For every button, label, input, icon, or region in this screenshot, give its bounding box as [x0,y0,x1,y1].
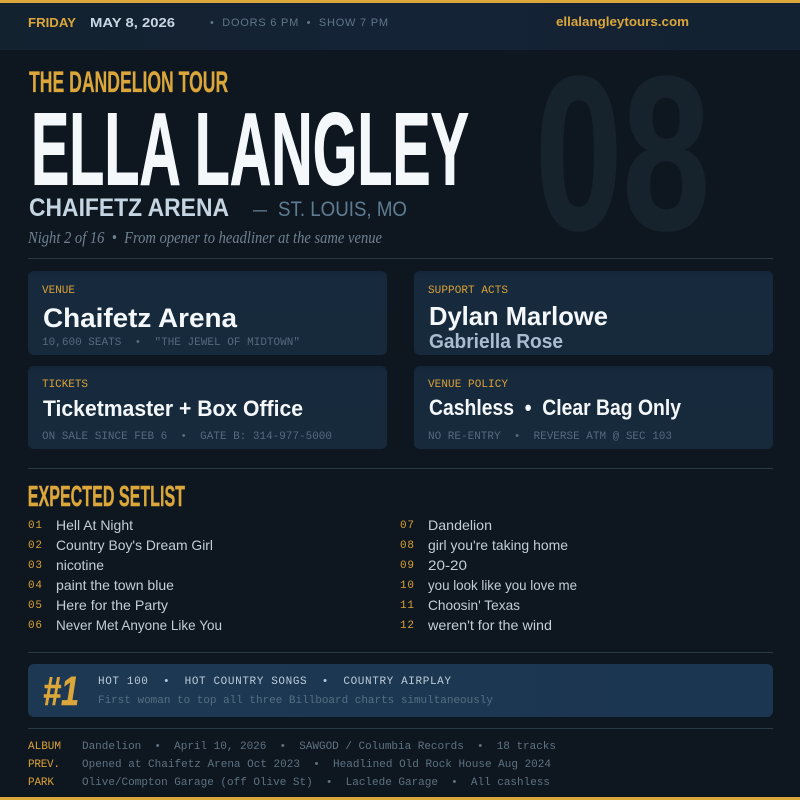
panel: venue policy: NO RE-ENTRY • REVERSE ATM @ SEC 103 [428,431,672,443]
setlist right column: Choosin' Texas [428,597,520,613]
panel: venue: 10,600 SEATS • "THE JEWEL OF MIDTOWN" [42,337,300,349]
panel: support acts: Gabriella Rose [429,331,563,353]
day: FRIDAY [28,15,76,30]
door and show times: • DOORS 6 PM • SHOW 7 PM [210,17,388,29]
setlist left column: 04 [28,580,42,592]
panel: tickets: TICKETS [42,379,88,391]
setlist right column: 09 [400,560,414,572]
setlist right column [400,517,577,633]
panel: support acts: SUPPORT ACTS [428,285,508,297]
setlist right column: 11 [400,600,414,612]
venue line: CHAIFETZ ARENA [29,194,229,222]
panel: tickets: Ticketmaster + Box Office [43,396,303,421]
footer: previous shows: PREV. [28,759,60,771]
panel: venue policy: VENUE POLICY [428,379,508,391]
panel: tickets [28,366,387,449]
setlist left column: 06 [28,620,42,632]
setlist right column: you look like you love me [428,577,577,593]
website: ellalangleytours.com [556,14,689,29]
footer: parking: Olive/Compton Garage (off Olive St) • Laclede Garage • All cashless [82,777,550,789]
setlist left column: Never Met Anyone Like You [56,617,222,633]
footer: previous shows: Opened at Chaifetz Arena Oct 2023 • Headlined Old Rock House Aug 2024 [82,759,551,771]
setlist left column: Here for the Party [56,597,168,613]
setlist right column: weren't for the wind [427,617,552,633]
setlist left column [28,517,222,633]
footer: parking: PARK [28,777,54,789]
bottom accent bar [0,797,800,800]
date: MAY 8, 2026 [90,15,175,30]
setlist right column: 07 [400,520,414,532]
panel: venue [28,271,387,355]
setlist right column: 12 [400,620,414,632]
setlist left column: 01 [28,520,42,532]
panel: tickets: ON SALE SINCE FEB 6 • GATE B: 314-977-5000 [42,431,332,443]
venue line: — [253,200,267,221]
setlist right column: girl you're taking home [428,537,568,553]
chart note: First woman to top all three Billboard charts simultaneously [98,695,493,707]
panel: venue policy [414,366,773,449]
number one: #1 [43,668,79,714]
panel: venue: Chaifetz Arena [43,303,238,333]
footer: album: ALBUM [28,741,61,753]
setlist right column: 20-20 [428,557,467,573]
footer: album: Dandelion • April 10, 2026 • SAWGOD / Columbia Records • 18 tracks [82,741,556,753]
setlist right column: 10 [400,580,414,592]
header bar [0,0,800,50]
setlist left column: 02 [28,540,42,552]
setlist left column: paint the town blue [56,577,174,593]
panel: venue: VENUE [42,285,75,297]
panel: support acts: Dylan Marlowe [429,301,608,331]
setlist right column: 08 [400,540,414,552]
setlist left column: Country Boy's Dream Girl [56,537,213,553]
chart names: HOT 100 • HOT COUNTRY SONGS • COUNTRY AIRPLAY [98,676,451,688]
callout: number one banner [28,664,773,717]
setlist left column: Hell At Night [56,517,133,533]
setlist left column: 03 [28,560,42,572]
setlist left column: 05 [28,600,42,612]
venue line: ST. LOUIS, MO [278,198,407,221]
panel: venue policy: Cashless • Clear Bag Only [429,395,682,420]
setlist right column: Dandelion [428,517,492,533]
venue line [29,194,407,222]
setlist left column: nicotine [56,557,104,573]
panel: support acts [414,271,773,355]
tagline: Night 2 of 16 • From opener to headliner at the same venue [27,228,382,247]
